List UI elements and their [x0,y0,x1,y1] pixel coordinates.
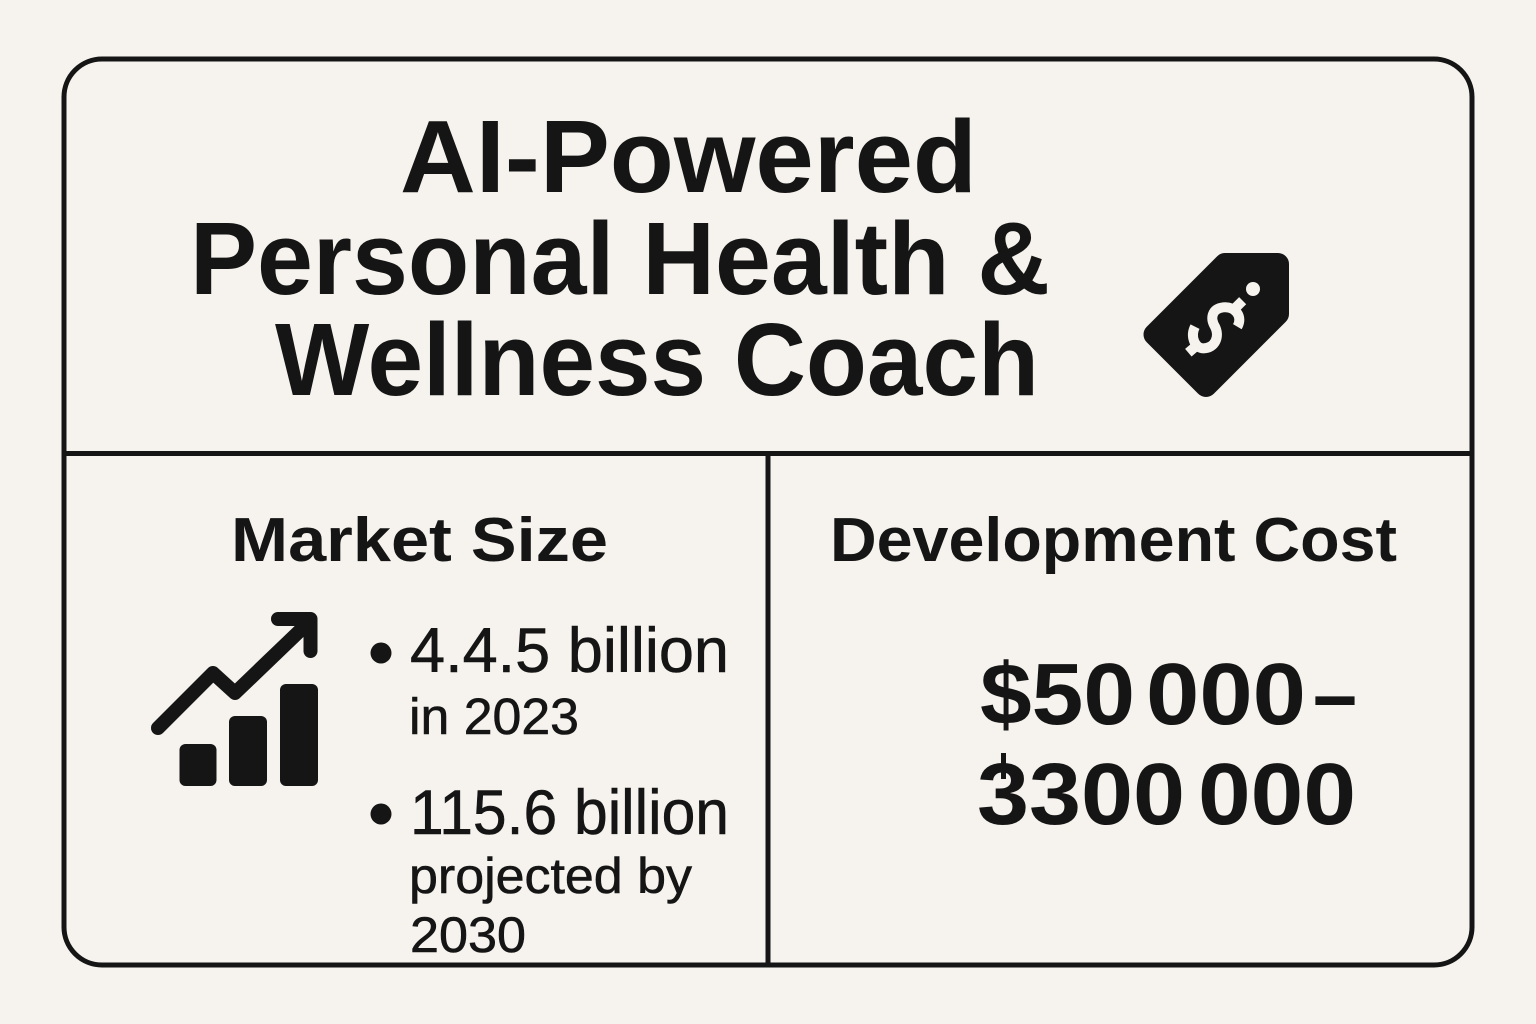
text block: development cost range: 3300 [977,746,1185,843]
title: Personal Health & [190,201,1050,316]
text block: development cost range [977,646,1357,843]
text block: 2023 market size: in 2023 [409,688,579,745]
text block: 2030 market projection: 2030 [410,907,526,963]
title [190,99,1050,417]
title: Wellness Coach [275,302,1039,417]
text block: 2030 market projection: projected by [409,848,692,904]
text block: development cost range: – [1313,646,1357,743]
icon: growth chart [158,619,318,786]
text block: 2030 market projection: 115.6 billion [410,778,729,848]
text block: 2023 market size [370,616,729,745]
title: AI-Powered [400,99,977,214]
text block: 2023 market size: 4.4.5 billion [410,616,729,686]
text block: development cost range: 000 [1146,646,1306,743]
text block: development cost range: $50 [980,646,1135,743]
icon: price tag [1154,264,1278,386]
heading: market size: Market Size [231,506,608,575]
heading: development cost: Development Cost [830,506,1397,575]
text block: development cost range: 000 [1198,746,1356,843]
text block: 2030 market projection [370,778,729,963]
